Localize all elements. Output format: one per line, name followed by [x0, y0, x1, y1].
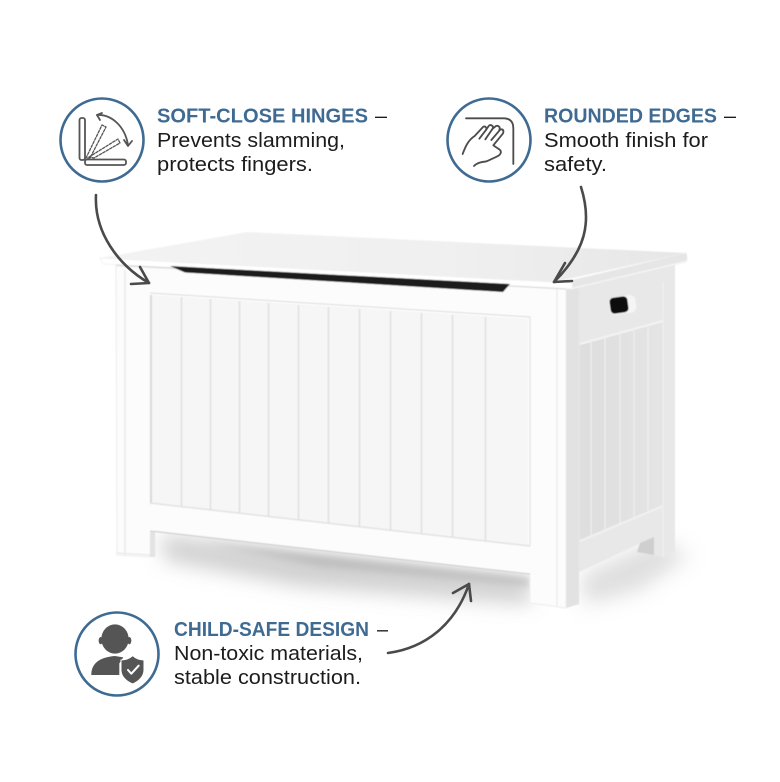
- text: soft-close hinges: Prevents slamming,: [157, 130, 345, 152]
- text: child-safe design: CHILD-SAFE DESIGN: [174, 619, 369, 641]
- arrow: soft-close hinges: [96, 195, 149, 284]
- arrow: child-safe design: [388, 584, 471, 653]
- side face: [566, 264, 675, 608]
- text: rounded edges: ROUNDED EDGES: [544, 106, 717, 128]
- text: child-safe design: [174, 619, 389, 689]
- toy box product illustration: [100, 232, 690, 608]
- text: child-safe design: stable construction.: [174, 667, 361, 689]
- floor shadow: [160, 535, 690, 605]
- icon: hand on rounded edge: [448, 98, 530, 182]
- callout: soft-close hinges: [60, 98, 388, 182]
- text: rounded edges: Smooth finish for: [544, 130, 708, 152]
- text: child-safe design: Non-toxic materials,: [174, 643, 363, 665]
- text: soft-close hinges: –: [375, 106, 388, 128]
- text: rounded edges: –: [724, 106, 737, 128]
- icon: child with shield: [76, 612, 158, 696]
- icon: hinge: [60, 98, 144, 182]
- text: child-safe design: –: [377, 619, 389, 641]
- text: soft-close hinges: SOFT-CLOSE HINGES: [157, 106, 368, 128]
- callout: rounded edges: [448, 98, 737, 182]
- text: rounded edges: [544, 106, 737, 176]
- handle hole: [608, 294, 637, 316]
- front face: [116, 266, 566, 608]
- lid: [100, 232, 687, 292]
- lid gap: [170, 266, 510, 292]
- text: soft-close hinges: protects fingers.: [157, 154, 313, 176]
- arrow: rounded edges: [554, 187, 586, 282]
- callout: child-safe design: [76, 612, 389, 696]
- text: soft-close hinges: [157, 106, 388, 176]
- text: rounded edges: safety.: [544, 154, 607, 176]
